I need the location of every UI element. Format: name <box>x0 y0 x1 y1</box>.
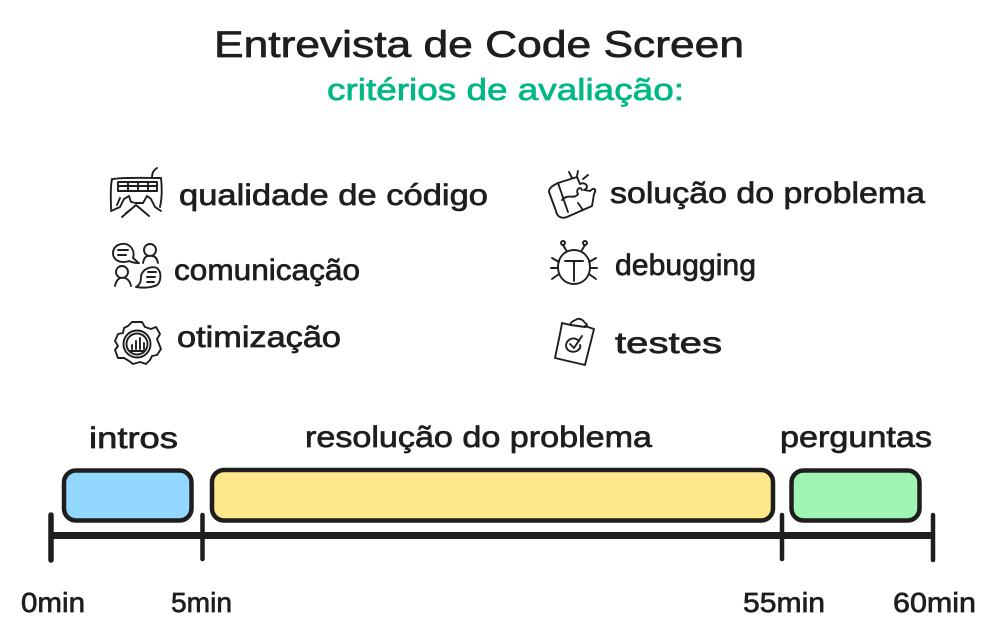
label: resolução do problema: resolução do problema <box>305 421 652 454</box>
tick: 5min <box>200 515 205 559</box>
timeline axis <box>50 532 933 539</box>
bar: intros <box>64 470 192 520</box>
label: qualidade de código: qualidade de código <box>179 179 488 212</box>
tick: 0min <box>48 515 54 560</box>
label: testes: testes <box>615 327 722 360</box>
bar: problem solving <box>212 470 773 520</box>
subtitle: critérios de avaliação: <box>327 72 684 107</box>
icon: two people talking <box>113 244 160 288</box>
title: Entrevista de Code Screen <box>214 24 744 65</box>
label: debugging: debugging <box>615 249 756 282</box>
timeline section <box>21 421 976 618</box>
label: perguntas: perguntas <box>780 421 932 454</box>
time: 0min: 0min <box>21 587 85 618</box>
label: otimização: otimização <box>177 321 341 354</box>
label: solução do problema: solução do problema <box>610 177 925 210</box>
time: 5min: 5min <box>171 587 232 618</box>
tick: 55min <box>780 515 784 559</box>
icon: puzzle book <box>549 171 595 218</box>
icon: bug <box>551 241 597 284</box>
icon: gear with chart <box>115 322 161 364</box>
time: 55min: 55min <box>743 587 825 618</box>
icon: hands on keyboard <box>111 168 162 217</box>
label: comunicação: comunicação <box>174 254 360 287</box>
criteria list <box>111 168 925 365</box>
tick: 60min <box>931 515 935 560</box>
time: 60min: 60min <box>893 587 976 618</box>
label: intros: intros <box>89 422 178 455</box>
bar: questions <box>792 470 920 520</box>
icon: clipboard check <box>555 319 594 365</box>
